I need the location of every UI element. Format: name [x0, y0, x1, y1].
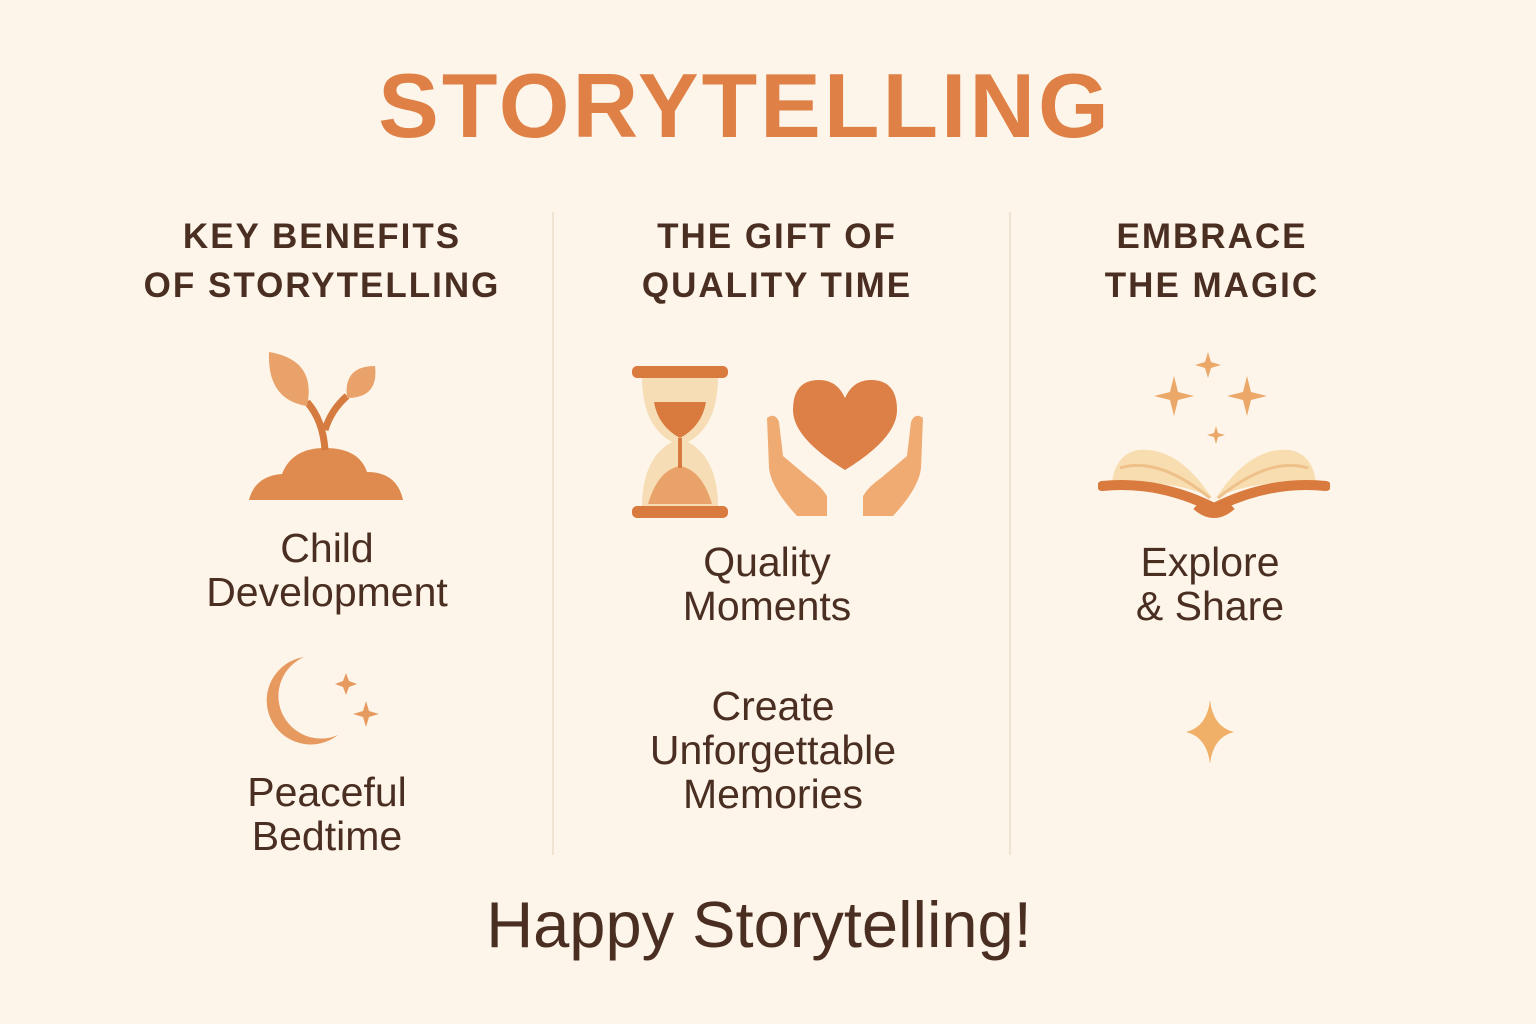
- heading: key benefits: OF STORYTELLING: [144, 266, 500, 305]
- text: child development: Child: [280, 525, 374, 571]
- panel: key benefits: [144, 217, 500, 859]
- text: create unforgettable memories: [650, 683, 896, 817]
- text: quality moments: [683, 539, 851, 629]
- text: quality moments: Moments: [683, 583, 851, 629]
- heading: quality time: THE GIFT OF: [657, 217, 897, 256]
- text: create unforgettable memories: Create: [711, 683, 835, 729]
- heading: quality time: QUALITY TIME: [642, 266, 912, 305]
- text: explore and share: [1136, 539, 1284, 629]
- text: peaceful bedtime: Peaceful: [247, 769, 407, 815]
- text: peaceful bedtime: Bedtime: [252, 813, 402, 859]
- text: create unforgettable memories: Memories: [683, 771, 863, 817]
- text: peaceful bedtime: [247, 769, 407, 859]
- heading: embrace the magic: [1105, 217, 1319, 305]
- heading: embrace the magic: THE MAGIC: [1105, 266, 1319, 305]
- text: child development: Development: [206, 569, 448, 615]
- title: STORYTELLING: [378, 56, 1112, 157]
- heading: quality time: [642, 217, 912, 305]
- icon: hourglass: [632, 366, 728, 518]
- icon: open book with sparkles: [1098, 352, 1330, 518]
- divider 1: [552, 212, 554, 855]
- icon: moon and stars: [266, 657, 379, 744]
- text: child development: [206, 525, 448, 615]
- footer: happy storytelling: Happy Storytelling!: [486, 888, 1032, 961]
- heading: embrace the magic: EMBRACE: [1117, 217, 1307, 256]
- text: explore and share: & Share: [1136, 583, 1284, 629]
- heading: key benefits: KEY BENEFITS: [183, 217, 461, 256]
- divider 2: [1009, 212, 1011, 855]
- icon: sparkle: [1186, 700, 1234, 764]
- text: create unforgettable memories: Unforgettable: [650, 727, 896, 773]
- icon: sprout: [249, 352, 403, 500]
- heading: key benefits: [144, 217, 500, 305]
- text: explore and share: Explore: [1140, 539, 1280, 585]
- panel: embrace the magic: [1098, 217, 1330, 764]
- text: quality moments: Quality: [703, 539, 831, 585]
- icon: heart in hands: [767, 380, 923, 516]
- panel: quality time: [632, 217, 923, 817]
